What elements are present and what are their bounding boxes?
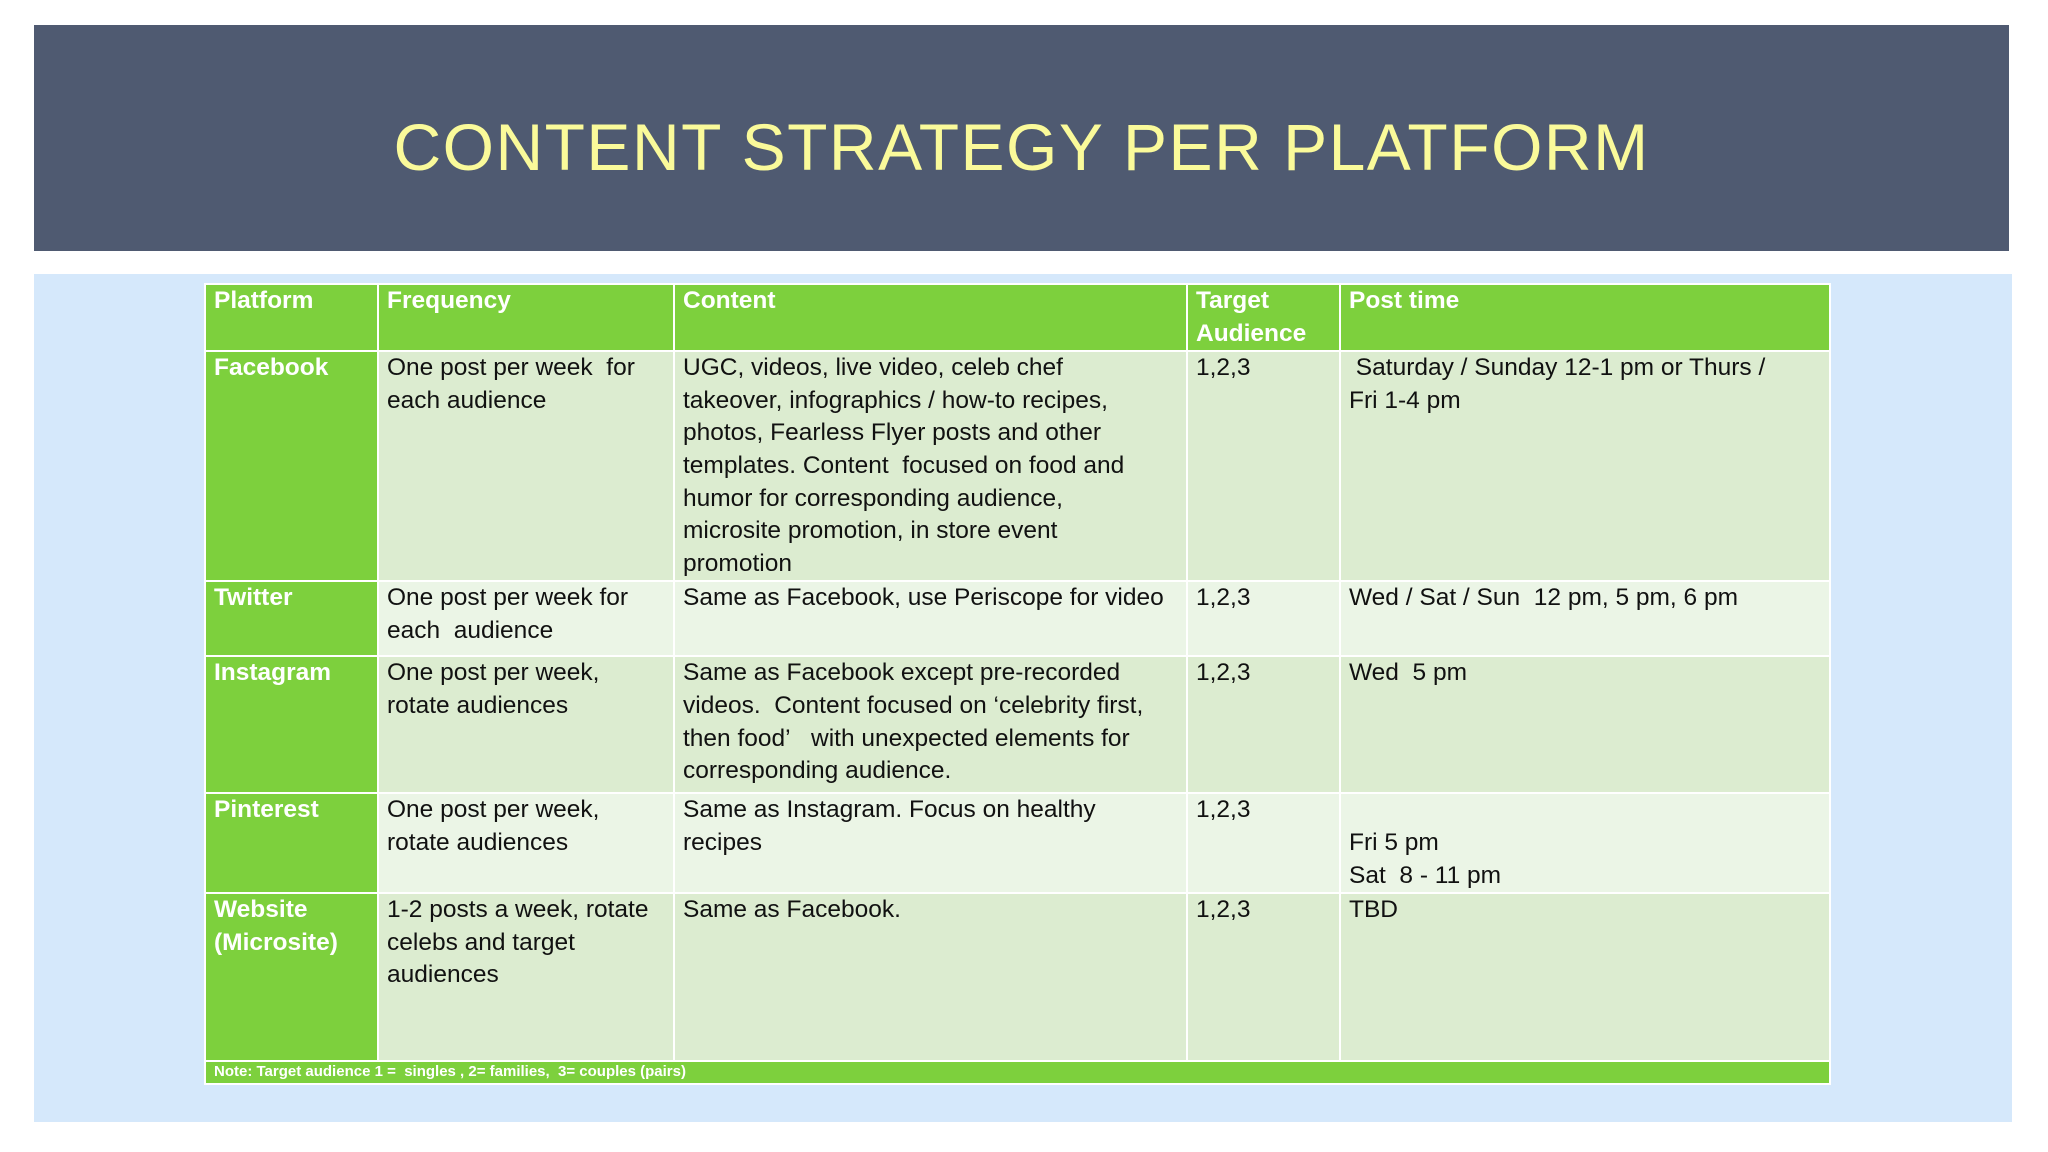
table: content strategy: corresponding audience. [683, 757, 951, 784]
table: content strategy: Facebook [214, 354, 328, 381]
table: content strategy: Note: Target audience 1 = singles , 2= families, 3= couples (pairs) [214, 1063, 686, 1080]
table: content strategy: 1,2,3 [1196, 354, 1250, 381]
table: content strategy: recipes [683, 829, 762, 856]
table: content strategy: Same as Facebook. [683, 896, 901, 923]
table: content strategy: Wed 5 pm [1349, 659, 1467, 686]
table: content strategy: One post per week for [387, 354, 635, 381]
title: CONTENT STRATEGY PER PLATFORM [393, 110, 1650, 184]
table: content strategy: Twitter [214, 584, 292, 611]
table: content strategy: celebs and target [387, 929, 575, 956]
table: content strategy: audiences [387, 961, 499, 988]
table: content strategy: One post per week, [387, 796, 599, 823]
table: content strategy: then food’ with unexpected elements for [683, 725, 1130, 752]
table: content strategy: takeover, infographics / how-to recipes, [683, 387, 1108, 414]
table: content strategy: rotate audiences [387, 829, 568, 856]
table: content strategy: Wed / Sat / Sun 12 pm, 5 pm, 6 pm [1349, 584, 1738, 611]
table: content strategy: humor for corresponding audience, [683, 485, 1063, 512]
table: content strategy: Audience [1196, 320, 1306, 347]
table: content strategy: rotate audiences [387, 692, 568, 719]
table: content strategy: microsite promotion, in store event [683, 517, 1057, 544]
table: content strategy: photos, Fearless Flyer posts and other [683, 419, 1101, 446]
table: content strategy: TBD [1349, 896, 1398, 923]
table: content strategy: each audience [387, 617, 553, 644]
panel: table background [34, 274, 2012, 1122]
table: content strategy: Fri 1-4 pm [1349, 387, 1461, 414]
table: content strategy: Same as Facebook, use Periscope for video [683, 584, 1164, 611]
table: content strategy: Pinterest [214, 796, 319, 823]
table: content strategy: UGC, videos, live video, celeb chef [683, 354, 1063, 381]
table: content strategy: One post per week, [387, 659, 599, 686]
table: content strategy: each audience [387, 387, 546, 414]
table: content strategy: promotion [683, 550, 792, 577]
table: content strategy: videos. Content focused on ‘celebrity first, [683, 692, 1143, 719]
table: content strategy: Platform [214, 287, 313, 314]
table: content strategy: Content [683, 287, 776, 314]
table: content strategy: Target [1196, 287, 1269, 314]
table: content strategy: 1,2,3 [1196, 584, 1250, 611]
table: content strategy: 1-2 posts a week, rotate [387, 896, 648, 923]
table: content strategy: 1,2,3 [1196, 796, 1250, 823]
table: content strategy: Saturday / Sunday 12-1 pm or Thurs / [1356, 354, 1765, 381]
table: content strategy: Sat 8 - 11 pm [1349, 862, 1501, 889]
table: content strategy: 1,2,3 [1196, 659, 1250, 686]
table: content strategy: Frequency [387, 287, 511, 314]
table: content strategy: Instagram [214, 659, 331, 686]
table: content strategy: Same as Instagram. Focus on healthy [683, 796, 1096, 823]
table: content strategy: Same as Facebook except pre-recorded [683, 659, 1120, 686]
table: content strategy: 1,2,3 [1196, 896, 1250, 923]
table: content strategy: One post per week for [387, 584, 628, 611]
table: content strategy: Fri 5 pm [1349, 829, 1439, 856]
table: content strategy: templates. Content focused on food and [683, 452, 1124, 479]
table: content strategy: (Microsite) [214, 929, 338, 956]
table: content strategy: Website [214, 896, 308, 923]
title band [34, 25, 2009, 251]
table: content strategy [204, 283, 1831, 1085]
table: content strategy: Post time [1349, 287, 1459, 314]
